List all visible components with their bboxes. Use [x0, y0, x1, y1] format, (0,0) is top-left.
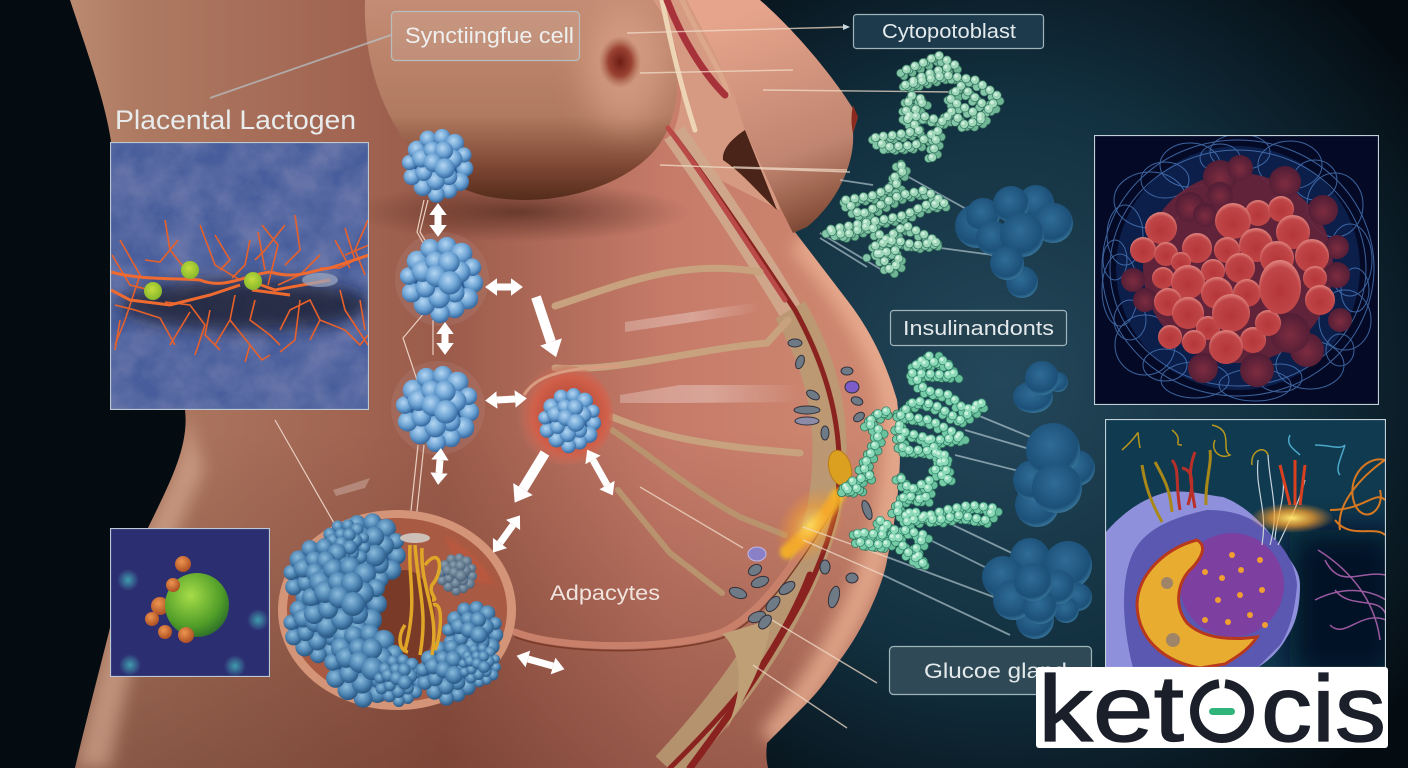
blue cell cluster 2 — [400, 237, 483, 323]
shadow under breast — [350, 182, 690, 242]
vesicles along the vessel — [728, 339, 874, 631]
logo: ketOcis — [1036, 656, 1388, 761]
yellow fibres — [400, 545, 440, 655]
striped arc band — [515, 500, 833, 646]
yellow glow — [761, 448, 859, 577]
tan branch 3 — [612, 417, 800, 453]
label: Cytopotoblast: Cytopotoblast — [882, 21, 1016, 43]
pocket around central cell — [517, 365, 620, 465]
panel: red cell cluster — [1094, 134, 1379, 405]
logo: ketOcis: ket — [1038, 656, 1184, 761]
left rim light — [75, 410, 205, 768]
channel between breasts — [653, 0, 780, 210]
panel: blue tissue with orange veins — [110, 142, 370, 410]
title: Placental Lactogen: Placental Lactogen — [115, 105, 356, 135]
panel: cell with receptors — [1105, 419, 1400, 680]
tan branch 5 — [618, 490, 722, 593]
label: Insulinandonts — [890, 310, 1066, 346]
right breast — [687, 0, 858, 233]
breast highlight — [583, 10, 667, 130]
arrows — [438, 215, 607, 666]
label: Adpacytes: Adpacytes — [550, 582, 660, 605]
dark wedge — [723, 130, 777, 210]
lines between cells — [275, 200, 433, 530]
label: Cytopotoblast — [854, 14, 1044, 48]
label: Glucoe gland: Glucoe gland — [924, 660, 1067, 683]
blue cell cluster 4 — [538, 388, 601, 453]
light beams — [333, 302, 800, 496]
dark blue cell middle — [1013, 423, 1095, 527]
right nipple — [852, 105, 858, 133]
tan cap — [400, 533, 430, 543]
nipple — [599, 36, 641, 88]
green molecule lower — [853, 472, 999, 567]
central breast — [365, 0, 677, 200]
right rim light — [770, 240, 897, 740]
label: Synctiingfue cell: Synctiingfue cell — [405, 23, 574, 48]
blue cell cluster 1 — [402, 129, 473, 203]
panel: green cell — [110, 528, 270, 677]
dark blue cell lower — [982, 538, 1092, 639]
label: Synctiingfue cell — [392, 12, 580, 60]
tan vessel band and red vessels — [515, 0, 839, 768]
dark blue cell small — [1013, 361, 1068, 413]
logo: ketOcis: cis — [1261, 656, 1386, 761]
body torso — [60, 0, 910, 768]
tan branch 1 — [555, 268, 760, 306]
lower tan wedge — [722, 620, 770, 730]
tan branch 4 — [612, 430, 785, 535]
leader lines — [210, 24, 1057, 728]
green molecule middle — [839, 351, 987, 494]
halo behind clusters — [391, 232, 489, 455]
label: Glucoe gland — [890, 646, 1092, 694]
blue cell cluster 3 — [396, 366, 479, 452]
green molecule upper — [823, 54, 1001, 274]
dark blue cell upper — [955, 185, 1073, 298]
label: Insulinandonts: Insulinandonts — [903, 318, 1054, 340]
adipocyte mass — [278, 510, 516, 710]
tan branch 2 — [555, 320, 788, 368]
